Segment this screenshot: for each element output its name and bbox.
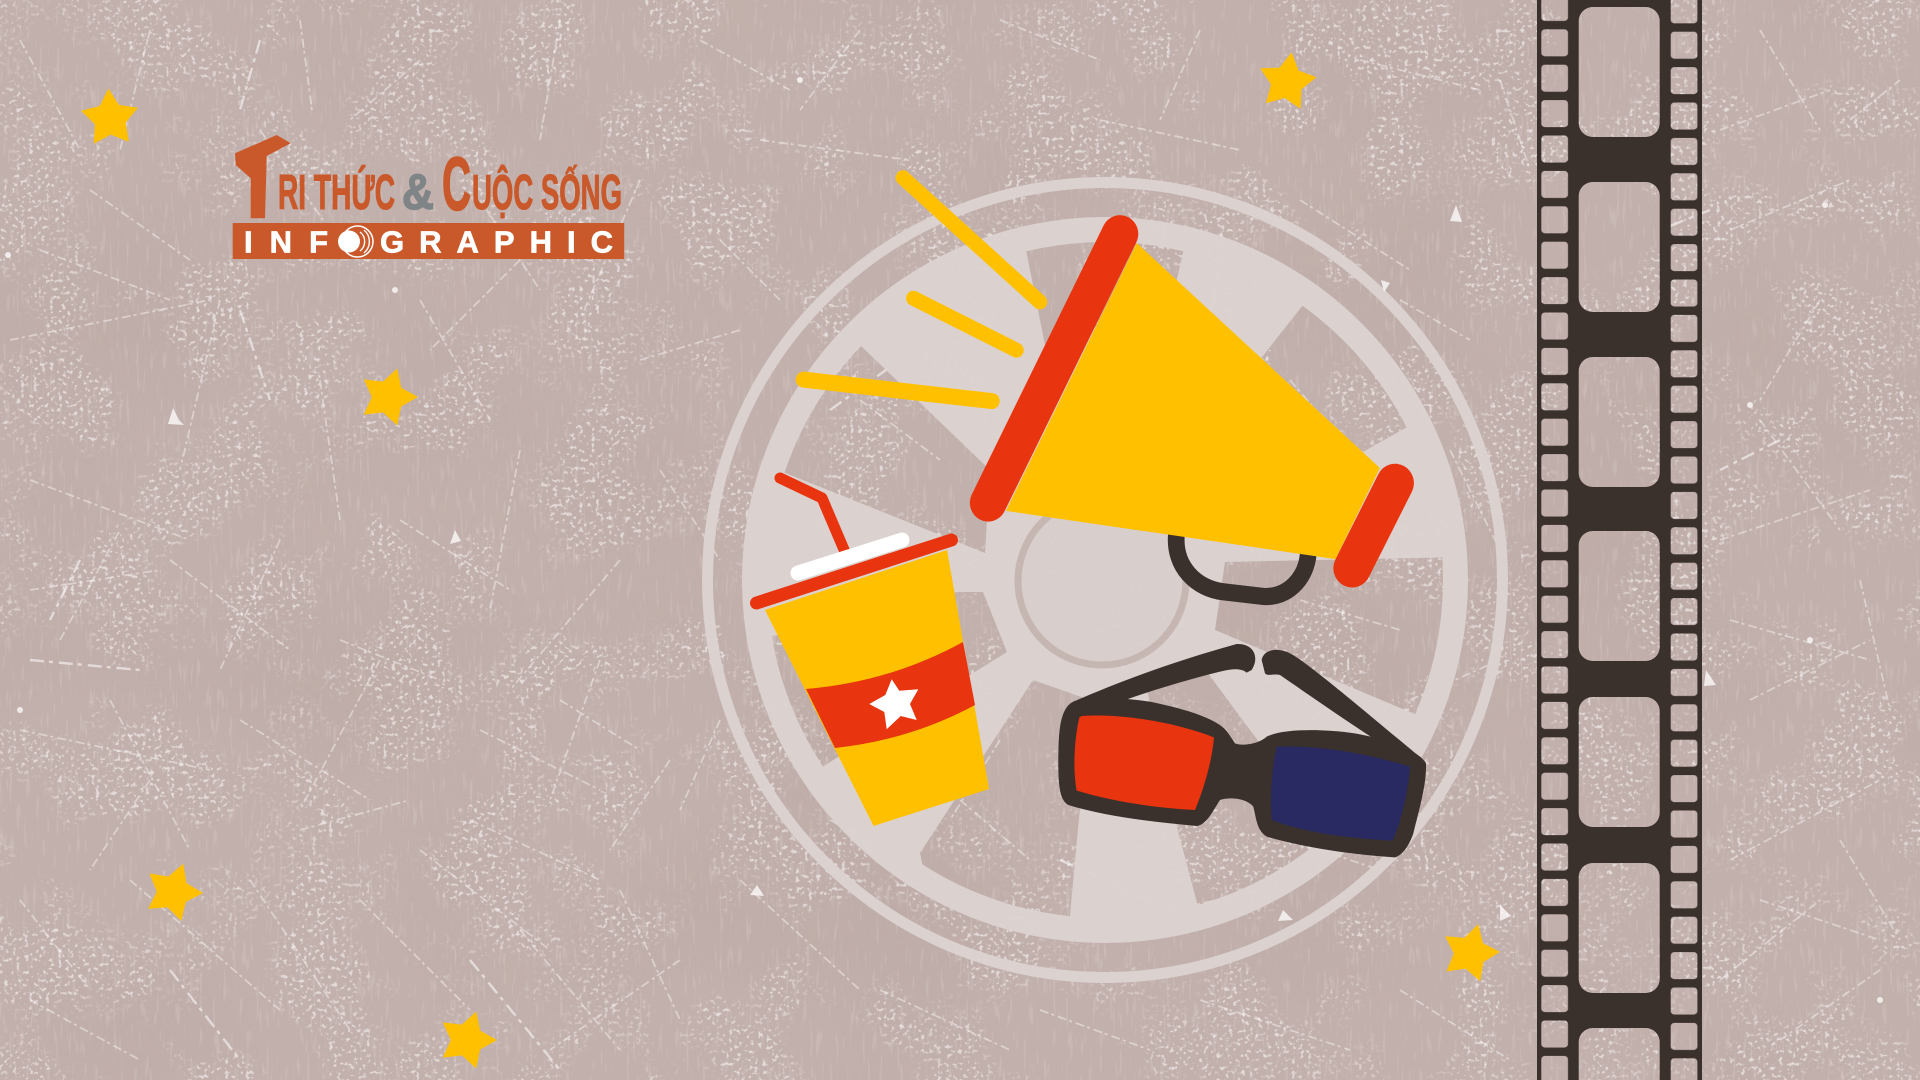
logo wordmark: Tri Thức [235,135,291,218]
reel wheel with spokes [742,217,1468,943]
star 5 [1255,48,1320,110]
star 3 [138,854,210,925]
text: big C: C [442,142,471,226]
text: INF: INF [244,224,328,260]
cup star [869,679,918,729]
cup lid [798,540,902,573]
star 1 [80,87,140,144]
icon: O swirl [338,226,373,257]
text: ampersand: & [402,164,434,220]
star 6 [1436,916,1506,984]
glasses blue lens [1271,746,1410,841]
film strip [1537,0,1702,1080]
megaphone body [1006,243,1380,559]
megaphone handle [1176,534,1308,597]
glasses red lens [1074,716,1214,810]
icon: megaphone [988,234,1395,597]
icon: drink cup [756,478,989,826]
text: GRAPHIC: GRAPHIC [380,224,613,260]
icon: 3D glasses [1058,644,1426,857]
cup straw [780,478,845,552]
cup rim [756,540,952,603]
reel hub ring [1018,497,1186,665]
logo mark: stylised T [235,135,291,218]
illustration: megaphone and rays [804,178,1395,597]
logo wordmark: Tri Thức: T [252,175,264,213]
star 2 [353,360,424,429]
film reel [700,170,1520,990]
star 4 [432,1003,503,1072]
megaphone front rim [988,234,1120,503]
logo [233,135,624,260]
reel outer ring [708,182,1502,978]
glasses frame [1058,698,1426,857]
text: UỘC SỐNG: UỘC SỐNG [472,165,622,220]
cup body [765,550,989,826]
icon: megaphone sound rays [804,178,1040,401]
cup band [806,642,975,748]
glasses left temple [1073,644,1255,702]
infographic band [233,223,624,259]
megaphone back rim [1352,483,1395,568]
text: RI THỨC: RI THỨC [278,165,395,220]
glasses right temple [1262,650,1423,760]
